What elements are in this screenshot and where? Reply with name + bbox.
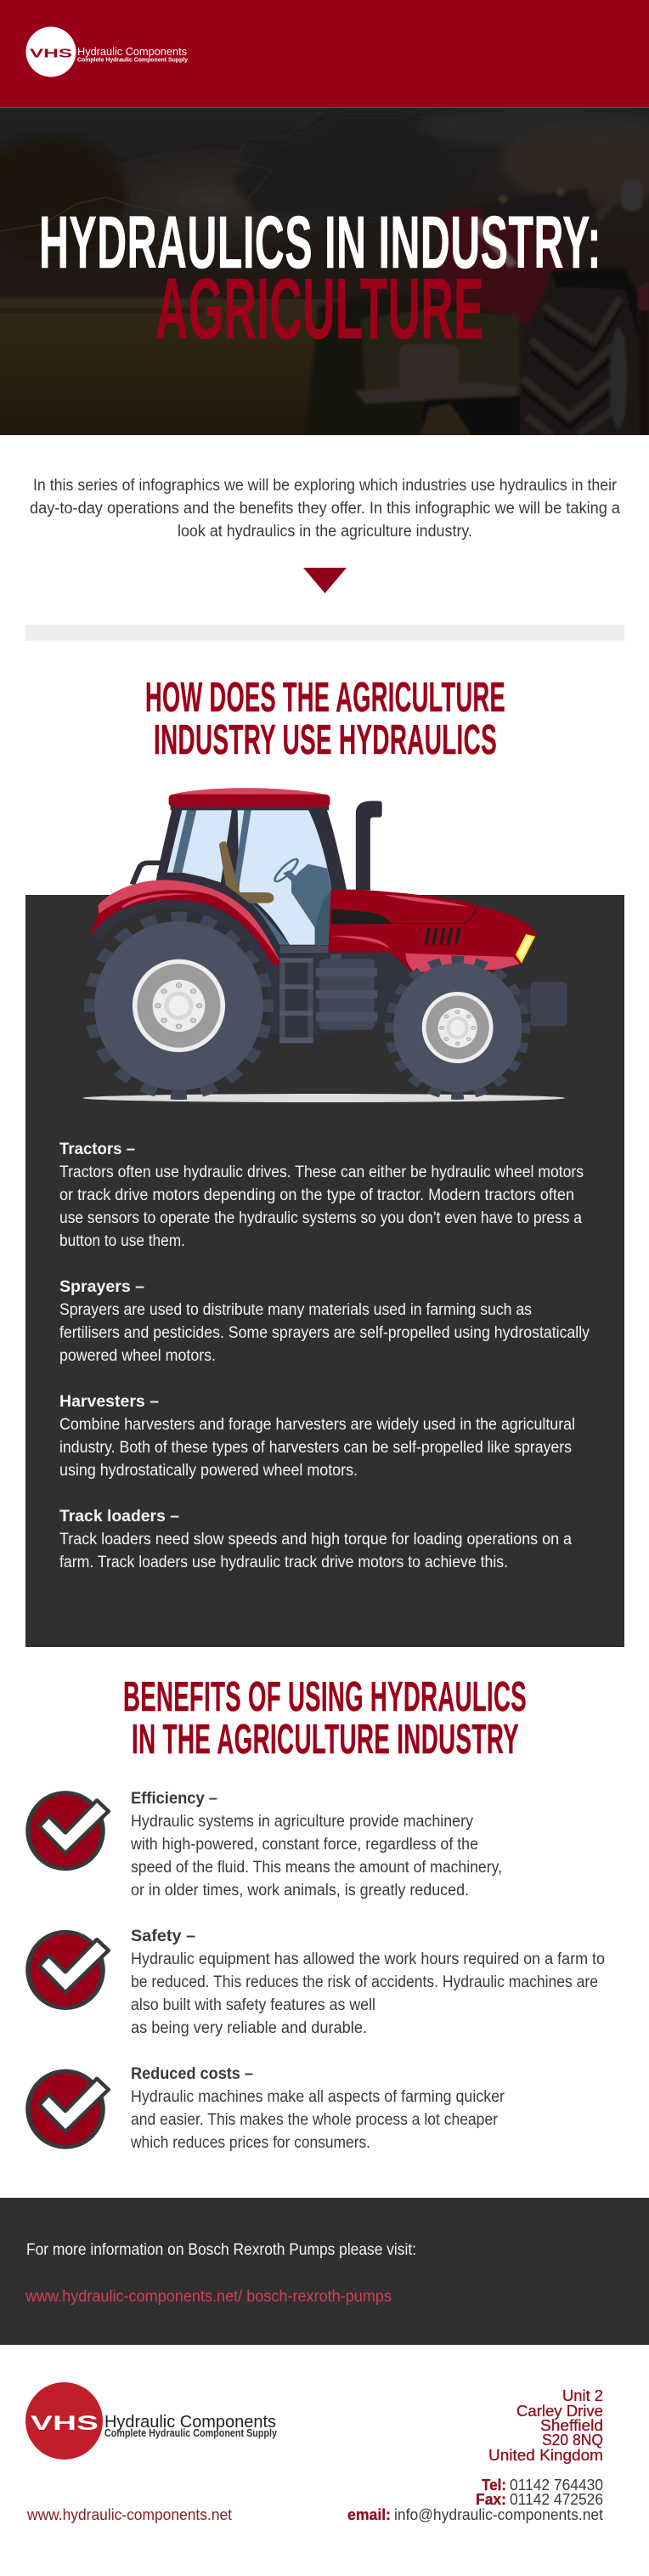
tractor ground shadow [82, 1094, 565, 1102]
sprayers: powered wheel motors. [59, 1347, 216, 1365]
rear fender [91, 873, 280, 971]
tractors: Tractors – [59, 1141, 135, 1158]
headlight [516, 935, 534, 962]
cab [156, 805, 347, 954]
footer website: www.hydraulic-components.net [26, 2505, 232, 2523]
footer logo: Hydraulic Components [104, 2412, 276, 2432]
intro text: day-to-day operations and the benefits they offer. In this infographic we will be taking a [30, 500, 620, 518]
footer contact details: 01142 472526 [510, 2490, 603, 2508]
heading: benefits [123, 1674, 527, 1763]
benefit: efficiency: Efficiency – [131, 1790, 217, 1808]
footer logo [25, 2382, 277, 2460]
benefit: reduced costs: Hydraulic machines make all aspects of farming quicker [131, 2088, 505, 2106]
benefit: efficiency: Hydraulic systems in agriculture provide machinery [131, 1813, 473, 1831]
benefit: safety: Hydraulic equipment has allowed the work hours required on a farm to [131, 1950, 605, 1968]
rear bumper weight [516, 982, 567, 1027]
benefit: reduced costs: Reduced costs – [131, 2065, 253, 2083]
footer address: Sheffield [540, 2416, 603, 2434]
exhaust pipe [356, 801, 382, 890]
fuel tank [316, 954, 377, 1030]
text: agricultural machinery uses [59, 1141, 590, 1571]
benefit: efficiency [130, 1790, 502, 1899]
harvesters: industry. Both of these types of harvesters can be self-propelled like sprayers [59, 1439, 572, 1457]
tractors: Tractors often use hydraulic drives. These can either be hydraulic wheel motors [59, 1163, 584, 1181]
more information band: www.hydraulic-components.net/ bosch-rexroth-pumps [25, 2288, 392, 2306]
footer contact details: info@hydraulic-components.net [394, 2505, 603, 2523]
footer contact details: email: [347, 2505, 391, 2523]
tractors [59, 1141, 584, 1250]
footer address: United Kingdom [488, 2446, 603, 2464]
driver seat [219, 841, 274, 903]
harvesters: Harvesters – [59, 1393, 159, 1411]
more information band: For more information on Bosch Rexroth Pumps please visit: [26, 2241, 416, 2259]
intro text [30, 477, 620, 541]
dashboard [291, 864, 331, 945]
footer address [488, 2386, 603, 2464]
sprayers: fertilisers and pesticides. Some sprayers are self-propelled using hydrostatically [59, 1324, 590, 1342]
track loaders [59, 1508, 572, 1571]
footer address: Carley Drive [516, 2402, 603, 2420]
benefit: efficiency: with high-powered, constant force, regardless of the [130, 1836, 478, 1854]
heading: how does agriculture use hydraulics [145, 675, 505, 763]
track loaders: farm. Track loaders use hydraulic track drive motors to achieve this. [59, 1554, 508, 1571]
icon: check mark safety [28, 1932, 109, 2008]
sprayers [59, 1278, 590, 1365]
benefit: safety: Safety – [131, 1928, 195, 1945]
front wheel [390, 960, 526, 1096]
benefit: efficiency: speed of the fluid. This means the amount of machinery, [131, 1859, 502, 1877]
benefit: reduced costs [130, 2065, 505, 2152]
benefit: efficiency: or in older times, work animals, is greatly reduced. [131, 1882, 469, 1899]
panel: dark uses panel [25, 895, 624, 1647]
hero photo: tractor in a field at dusk [0, 108, 649, 435]
arrow: down triangle [303, 568, 347, 593]
tractors: use sensors to operate the hydraulic systems so you don’t even have to press a [59, 1209, 582, 1227]
header band [0, 0, 649, 109]
handrail [133, 863, 162, 885]
footer logo: VHS [31, 2412, 99, 2435]
tractors: button to use them. [59, 1232, 185, 1250]
steering wheel [272, 857, 301, 884]
benefit: safety [131, 1928, 605, 2037]
track loaders: Track loaders need slow speeds and high torque for loading operations on a [59, 1531, 572, 1548]
cab roof [169, 788, 330, 807]
benefit: safety: be reduced. This reduces the risk of accidents. Hydraulic machines are [131, 1973, 598, 1991]
header logo: Complete Hydraulic Component Supply [77, 56, 189, 63]
harvesters [59, 1393, 575, 1480]
engine hood [328, 890, 535, 973]
benefit: reduced costs: and easier. This makes the whole process a lot cheaper [131, 2111, 499, 2129]
chassis [266, 953, 417, 1034]
sprayers: Sprayers – [59, 1278, 144, 1296]
icon: check mark efficiency [28, 1792, 109, 1869]
harvesters: using hydrostatically powered wheel motors. [59, 1462, 358, 1480]
footer contact details: Fax: [476, 2490, 506, 2508]
sprayers: Sprayers are used to distribute many materials used in farming such as [59, 1301, 532, 1319]
tractors: or track drive motors depending on the type of tractor. Modern tractors often [59, 1186, 574, 1204]
icon: check mark reduced costs [28, 2071, 109, 2147]
rear wheel [91, 917, 267, 1094]
track loaders: Track loaders – [59, 1508, 179, 1526]
tractor illustration [82, 788, 567, 1102]
footer contact details: Tel: [482, 2476, 506, 2494]
more information band [0, 2198, 649, 2345]
header logo: VHS [30, 46, 72, 61]
footer address: Unit 2 [562, 2386, 603, 2404]
footer logo: Complete Hydraulic Component Supply [104, 2427, 277, 2439]
footer contact details: 01142 764430 [510, 2476, 603, 2494]
ladder [279, 958, 313, 1043]
intro text: look at hydraulics in the agriculture industry. [178, 523, 472, 541]
benefit: safety: as being very reliable and durable. [131, 2019, 367, 2037]
intro text: In this series of infographics we will be exploring which industries use hydraulics in their [33, 477, 618, 495]
footer contact details [347, 2476, 603, 2523]
title [39, 201, 601, 357]
benefit: reduced costs: which reduces prices for consumers. [130, 2134, 370, 2152]
header logo [25, 27, 189, 76]
header logo: Hydraulic Components [77, 45, 187, 58]
harvesters: Combine harvesters and forage harvesters are widely used in the agricultural [59, 1416, 575, 1434]
benefit: safety: also built with safety features as well [131, 1996, 375, 2014]
footer address: S20 8NQ [542, 2431, 603, 2449]
